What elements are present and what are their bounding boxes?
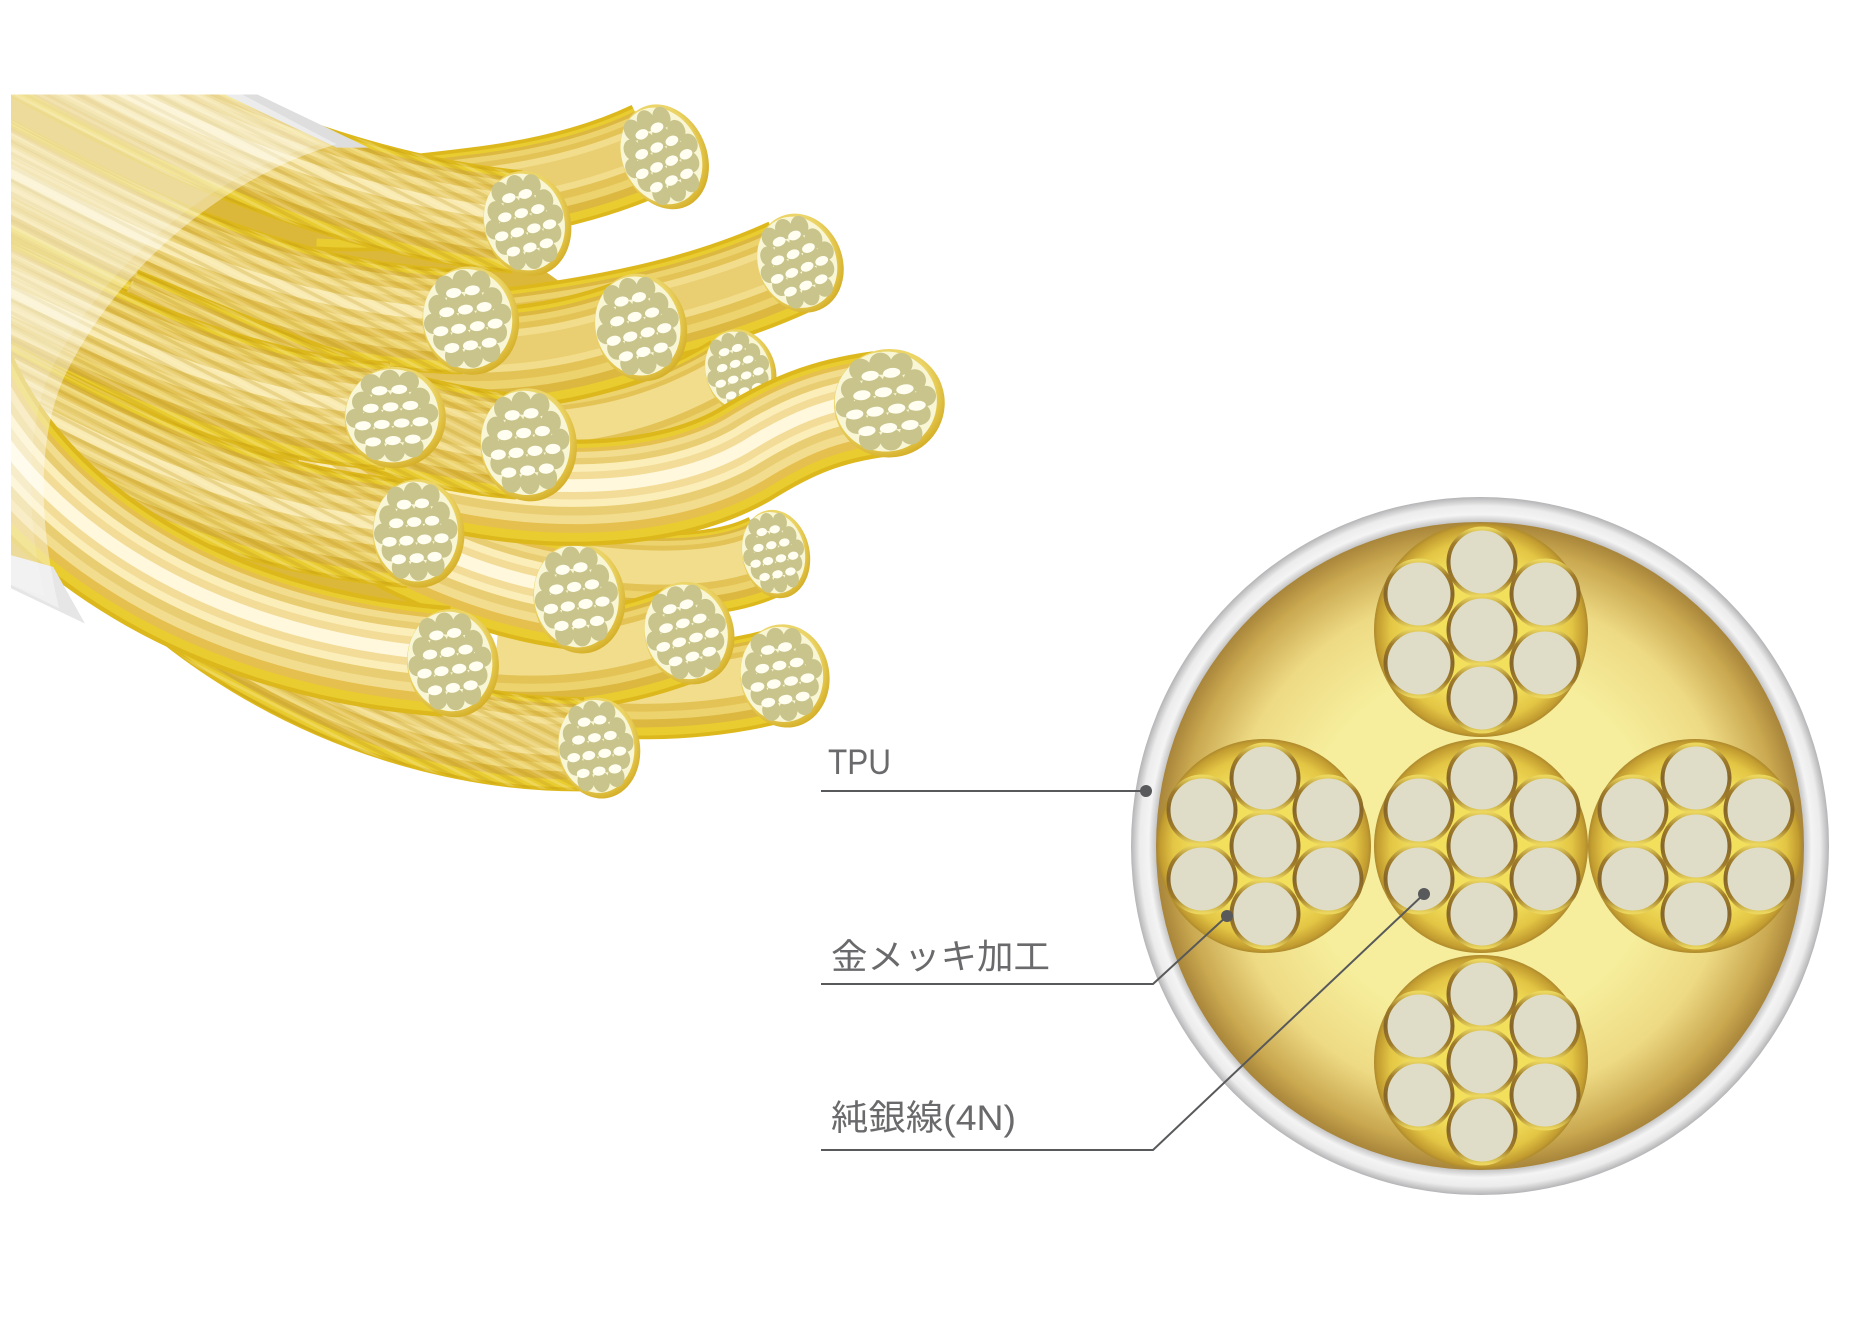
wire bundle: bottom [1374, 955, 1588, 1169]
wire bundle: right [1588, 739, 1802, 953]
label: gold plating [821, 910, 1233, 984]
strand 3 [508, 214, 844, 356]
base of strands under jacket [11, 97, 558, 602]
strand 10 [0, 371, 468, 591]
wire bundle: centre [1374, 739, 1588, 953]
translucent jacket over strands [11, 94, 369, 624]
strand 15 [617, 624, 830, 740]
strand 13 [496, 571, 746, 695]
label: TPU [821, 743, 1152, 797]
strand 16 [166, 646, 640, 798]
wire bundle: left [1157, 739, 1371, 953]
strand 6 [560, 329, 776, 440]
strand 12 [295, 465, 632, 659]
strand 4 [0, 146, 526, 381]
label: TPU: TPU [828, 743, 891, 782]
label: gold plating: 金メッキ加工 [831, 938, 1050, 977]
label: pure silver wire 4N: 純銀線(4N) [831, 1099, 1016, 1138]
strand 7 [0, 270, 449, 472]
strand 1 [319, 90, 725, 224]
strand 2 [11, 94, 572, 276]
gold-plated inner fill [1156, 522, 1804, 1170]
outer TPU jacket [1131, 497, 1829, 1195]
strand 5 [402, 264, 698, 391]
strand 8 [118, 312, 582, 506]
illustration: bundle of gold-plated cable strands [11, 94, 945, 798]
cross-section diagram of the cable [1131, 497, 1829, 1195]
strand 9 [425, 342, 952, 493]
label: pure silver wire 4N [821, 888, 1430, 1150]
strand 14 [0, 347, 506, 723]
strand 11 [590, 510, 810, 612]
wire bundle: top [1374, 523, 1588, 737]
